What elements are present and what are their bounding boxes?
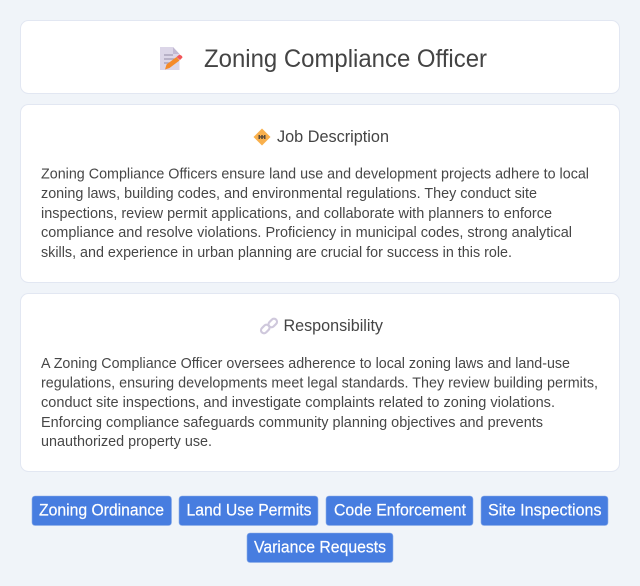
heading: responsibility: Responsibility (284, 317, 384, 335)
tag: variance requests: Variance Requests (254, 538, 386, 556)
tag: land use permits (179, 496, 318, 526)
tag: variance requests (247, 533, 393, 562)
icon: chain link (260, 318, 278, 334)
text block: job description body: compliance and resolve violations. Proficiency in municipal codes, strong analytical (41, 225, 572, 241)
tag: code enforcement (326, 496, 473, 526)
text block: responsibility body: conduct site inspections, and investigate complaints related to zoning violations. (41, 395, 555, 411)
tag group (32, 496, 608, 562)
text block: responsibility body: unauthorized property use. (41, 434, 212, 450)
text block: responsibility body: regulations, ensuring developments meet legal standards. They review building permits, (41, 376, 598, 392)
tag: land use permits: Land Use Permits (186, 502, 312, 520)
icon: document with pencil (160, 47, 182, 70)
text block: job description body: zoning laws, building codes, and environmental regulations. They conduct site (41, 186, 537, 202)
tag: code enforcement: Code Enforcement (334, 502, 466, 520)
panel: job description (20, 104, 620, 282)
text block: job description body (41, 166, 589, 261)
text block: job description body: skills, and experience in urban planning are crucial for success in this role. (41, 245, 512, 261)
tag: site inspections: Site Inspections (488, 502, 602, 520)
panel: title header (20, 20, 620, 94)
title: Zoning Compliance Officer (204, 45, 487, 73)
panel: responsibility (20, 294, 620, 472)
tag: zoning ordinance (32, 496, 172, 526)
text block: job description body: inspections, review permit applications, and collaborate with planners to enforce (41, 206, 552, 222)
heading: job description: Job Description (277, 128, 389, 146)
text block: responsibility body: A Zoning Compliance Officer oversees adherence to local zoning laws and land-use (41, 356, 570, 372)
tag: site inspections (481, 496, 608, 526)
text block: responsibility body (41, 356, 598, 450)
text block: job description body: Zoning Compliance Officers ensure land use and development projects adhere to local (41, 166, 589, 182)
icon: construction diamond sign (254, 128, 270, 146)
text block: responsibility body: Enforcing compliance safeguards community planning objectives and prevents (41, 415, 543, 431)
tag: zoning ordinance: Zoning Ordinance (39, 502, 164, 520)
